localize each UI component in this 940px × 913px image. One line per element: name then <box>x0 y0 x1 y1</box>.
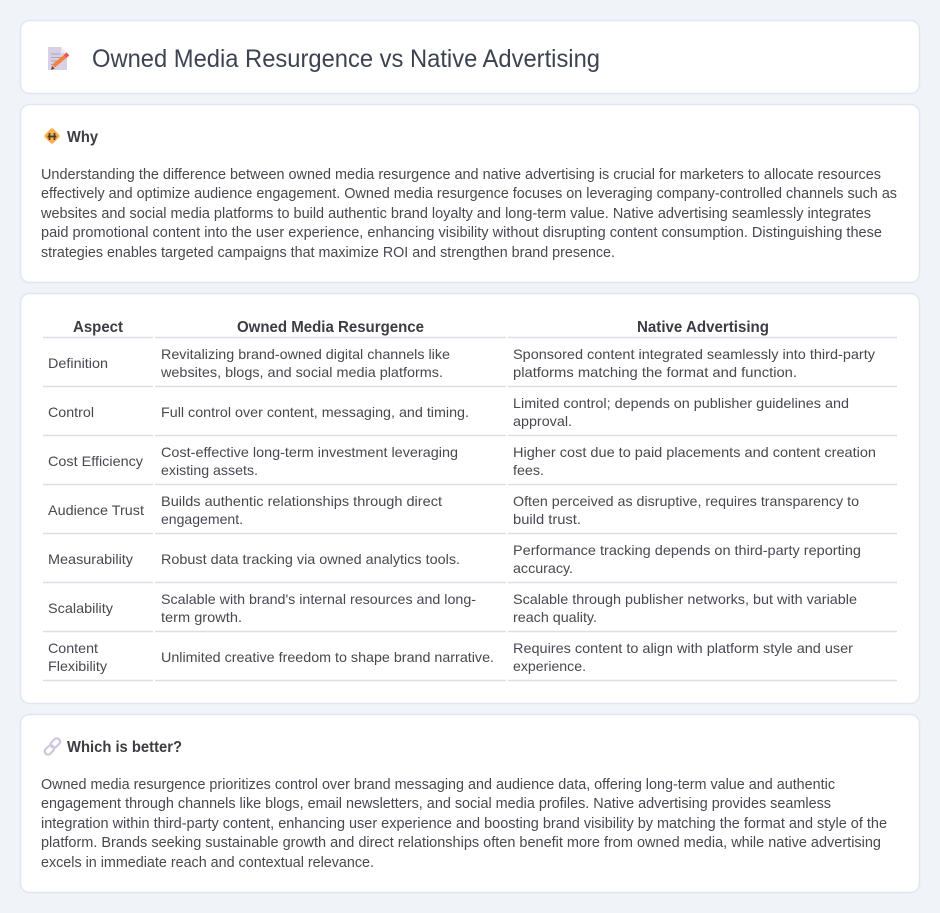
panel: which is better <box>20 714 920 892</box>
row: measurability: accuracy. <box>513 560 573 576</box>
row: content flexibility: Content <box>48 640 98 656</box>
text block: which is better <box>41 777 887 871</box>
row: definition: Sponsored content integrated seamlessly into third-party <box>513 346 875 362</box>
text block: why: strategies enables targeted campaigns that maximize ROI and strengthen brand presence. <box>41 245 615 261</box>
text block: which is better: platform. Brands seeking sustainable growth and direct relationships often benefit more from owned media, while native advertising <box>41 835 881 851</box>
heading: why: Why <box>67 129 98 146</box>
row: content flexibility: experience. <box>513 658 586 674</box>
row: control: approval. <box>513 413 572 429</box>
table header: Native Advertising <box>637 319 769 336</box>
row: content flexibility: Flexibility <box>48 658 107 674</box>
panel: header <box>20 20 920 94</box>
title: Owned Media Resurgence vs Native Advertising <box>92 45 600 73</box>
text block: why: websites and social media platforms to build authentic brand loyalty and long-term value. Native advertising seamlessly integrates <box>40 206 871 222</box>
row: audience trust: Builds authentic relationships through direct <box>161 493 442 509</box>
row: control: Limited control; depends on publisher guidelines and <box>513 395 849 411</box>
heading: which is better: Which is better? <box>67 739 182 756</box>
row: measurability: Robust data tracking via owned analytics tools. <box>161 551 460 567</box>
text block: why: effectively and optimize audience engagement. Owned media resurgence focuses on leveraging company-controlled channels such as <box>41 186 897 202</box>
row: definition <box>48 346 875 380</box>
row: audience trust: engagement. <box>161 511 243 527</box>
table header: Aspect <box>73 319 123 336</box>
row: content flexibility: Unlimited creative freedom to shape brand narrative. <box>161 649 494 665</box>
row: content flexibility: Requires content to align with platform style and user <box>513 640 853 656</box>
row: scalability <box>48 591 857 625</box>
row: cost efficiency: existing assets. <box>161 462 258 478</box>
text block: why: paid promotional content into the user experience, enhancing visibility without disrupting content consumption. Distinguishing these <box>41 225 882 241</box>
text block: which is better: engagement through channels like blogs, email newsletters, and social media profiles. Native advertising provides seamless <box>41 796 831 812</box>
text block: why <box>40 167 897 261</box>
row: scalability: term growth. <box>161 609 242 625</box>
row: measurability: Measurability <box>48 551 133 567</box>
row: cost efficiency: Higher cost due to paid placements and content creation <box>513 444 876 460</box>
row: scalability: reach quality. <box>513 609 597 625</box>
text block: which is better: excels in immediate reach and contextual relevance. <box>41 855 374 871</box>
row: scalability: Scalable with brand's internal resources and long- <box>161 591 476 607</box>
row: cost efficiency: fees. <box>513 462 544 478</box>
row: definition: websites, blogs, and social media platforms. <box>160 364 443 380</box>
panel: why <box>20 104 920 282</box>
row: audience trust: Audience Trust <box>48 502 144 518</box>
row: audience trust: build trust. <box>513 511 581 527</box>
row: content flexibility <box>48 640 853 674</box>
table header: Owned Media Resurgence <box>237 319 424 336</box>
row: audience trust <box>48 493 859 527</box>
icon: document with pencil <box>48 47 68 70</box>
row: cost efficiency <box>48 444 876 478</box>
row: control: Control <box>48 404 94 420</box>
text block: which is better: Owned media resurgence prioritizes control over brand messaging and audience data, offering long-term value and authentic <box>41 777 835 793</box>
table header <box>73 319 769 336</box>
panel: comparison table <box>20 294 920 704</box>
row: measurability <box>48 542 861 576</box>
row: audience trust: Often perceived as disruptive, requires transparency to <box>513 493 859 509</box>
row: definition: platforms matching the format and function. <box>513 364 797 380</box>
icon: warning diamond <box>44 128 60 144</box>
row: measurability: Performance tracking depends on third-party reporting <box>513 542 861 558</box>
row: cost efficiency: Cost-effective long-term investment leveraging <box>161 444 458 460</box>
row: scalability: Scalability <box>48 600 113 616</box>
text block: which is better: integration within third-party content, enhancing user experience and boosting brand visibility by matching the format and style of the <box>41 816 887 832</box>
row: scalability: Scalable through publisher networks, but with variable <box>513 591 857 607</box>
row: definition: Definition <box>48 355 108 371</box>
row: control <box>48 395 849 429</box>
text block: why: Understanding the difference between owned media resurgence and native advertising is crucial for marketers to allocate resources <box>41 167 881 183</box>
row: definition: Revitalizing brand-owned digital channels like <box>161 346 450 362</box>
row: cost efficiency: Cost Efficiency <box>48 453 143 469</box>
icon: chain link <box>43 737 61 756</box>
row: control: Full control over content, messaging, and timing. <box>161 404 469 420</box>
